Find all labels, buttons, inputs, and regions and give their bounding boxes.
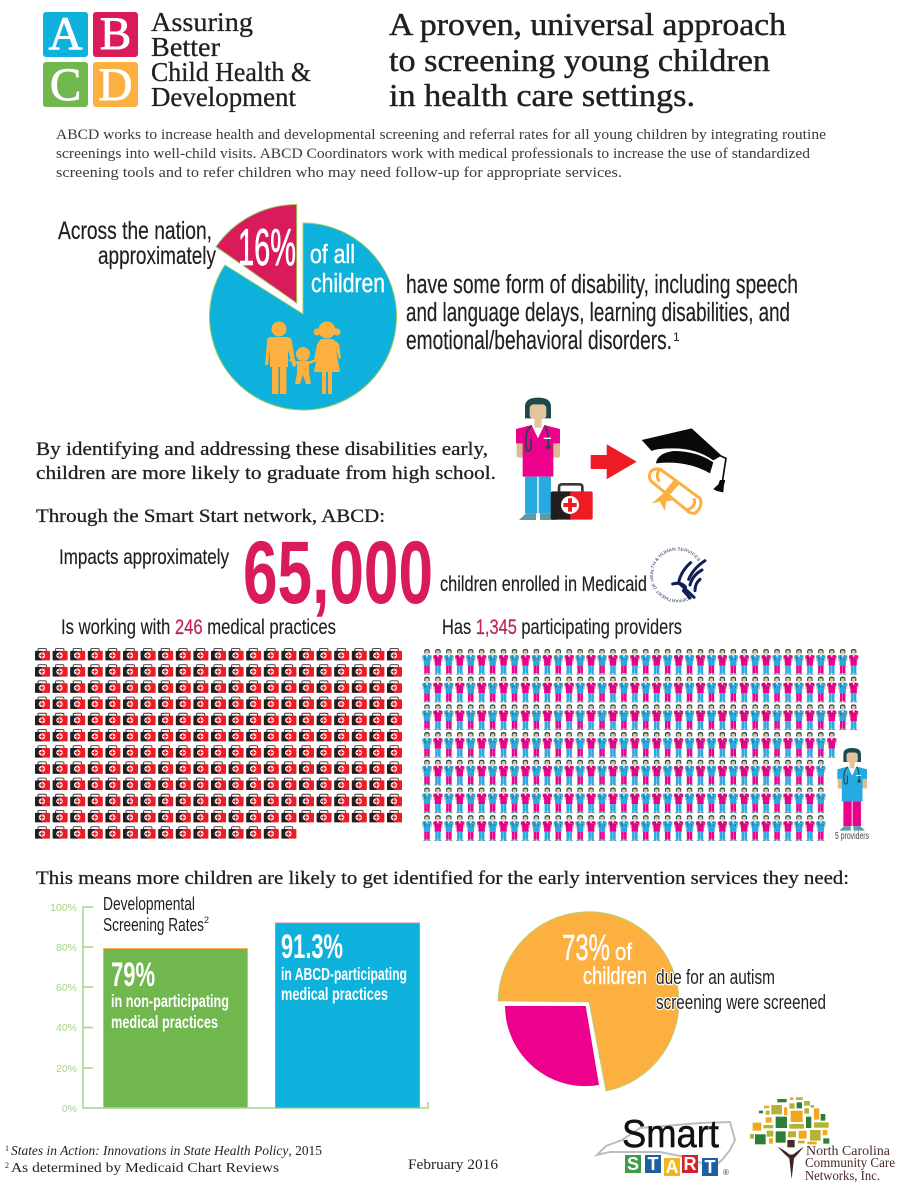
label: of all children [310,241,385,298]
footnotes: As determined by Medicaid Chart Reviews [11,1160,279,1175]
text: across the nation: Across the nation, [58,217,212,245]
stat: impacts 65,000 children [59,522,647,622]
axis: 40% [56,1022,77,1034]
heading: early intervention: This means more children are likely to get identified for the early intervention services they need: [36,868,849,889]
logo: North Carolina Community Care Networks: Community Care [805,1156,895,1171]
text: identifying early: By identifying and addressing these disabilities early, [36,439,488,460]
bar: 79%: in non-participating [111,991,229,1011]
footnotes: 2 [5,1161,9,1170]
axis: 60% [56,982,77,994]
icon: family [265,322,341,394]
logo: Smart Start: R [684,1154,696,1174]
label: 73% of children [562,927,647,990]
logo: Smart Start: S [627,1154,639,1174]
bar: 91.3%: 91.3% [281,928,343,966]
heading: medical practices: Is working with 246 medical practices [61,615,336,639]
heading: participating providers: Has 1,345 participating providers [442,615,682,639]
pictogram: 246 medical kits [35,648,402,839]
label: 73% of children: of [615,939,632,966]
block B: B [100,8,131,60]
logo: North Carolina Community Care Networks [750,1097,895,1182]
footnotes: 1 [5,1144,9,1153]
text: identifying early: children are more likely to graduate from high school. [36,463,496,484]
bar: 79%: 79% [111,956,155,994]
axis: 100% [50,902,77,914]
title [389,6,786,113]
block B [93,8,138,60]
bar: 79%: medical practices [111,1012,218,1032]
arrow [591,444,637,479]
bar: 79% [104,948,248,1108]
stat: impacts 65,000 children: 65,000 [243,522,433,622]
wordmark: Development [151,82,296,112]
pie slice: 27% [505,1006,599,1086]
legend: 5 providers [835,748,869,842]
axis: 20% [56,1063,77,1075]
pie chart: 16% of all children [210,204,397,410]
text: identifying early [36,439,496,484]
logo: Smart Start [597,1113,735,1177]
axis: 80% [56,942,77,954]
wordmark [151,7,311,112]
text: disability description: 1 [673,330,680,344]
wordmark: Child Health & [151,57,311,87]
bar: 91.3%: in ABCD-participating [281,964,407,984]
text: across the nation: approximately [98,242,216,270]
icon: doctor with medical kit [516,398,593,520]
icon: graduation cap and diploma [642,428,726,513]
title: A proven, universal approach [389,6,786,42]
block D: D [99,59,132,111]
bar chart: developmental screening rates [50,893,428,1115]
block C [43,59,88,111]
stat: impacts 65,000 children: children enrolled in Medicaid [440,572,647,596]
label: due for an autism screening [656,967,826,1014]
wordmark: Assuring [151,7,253,37]
title: in health care settings. [389,77,695,113]
chart title: 2 [204,915,209,925]
block C: C [50,59,81,111]
logo: ABCD blocks and wordmark [43,7,311,112]
title: to screening young children [389,42,770,78]
pie slice: 73% [498,912,679,1091]
logo: Smart Start: T [648,1154,658,1174]
logo: North Carolina Community Care Networks: North Carolina [806,1144,891,1159]
text: disability description: emotional/behavioral disorders. [406,327,672,355]
wordmark: Better [151,32,220,62]
intro paragraph [56,127,826,181]
logo: Smart Start: A [666,1157,678,1177]
pie chart: autism screening [498,912,826,1091]
footnotes [5,1143,322,1175]
stat: impacts 65,000 children: Impacts approximately [59,545,229,569]
label: of all children: children [311,270,385,298]
text: disability description [406,271,798,355]
chart title: Developmental [103,893,195,914]
label: of all children: of all [310,241,355,269]
intro paragraph: screenings into well-child visits. ABCD Coordinators work with medical professionals to increase the use of standardized [56,146,811,162]
label: due for an autism screening: due for an autism [656,967,775,989]
logo: Smart Start: ® [723,1168,729,1177]
label: 73% of children: children [583,963,647,990]
footnotes: States in Action: Innovations in State Health Policy, 2015 [11,1143,322,1158]
pictogram: provider figures [422,649,858,841]
text: through the smart start network: Through the Smart Start network, ABCD: [36,506,385,527]
intro paragraph: screening tools and to refer children who may need follow-up for appropriate services. [56,165,622,181]
bar: 91.3% [276,923,420,1108]
label: 16%: 16% [238,219,296,277]
chart title [103,893,209,935]
legend: 5 providers: 5 providers [835,831,869,842]
chart title: Screening Rates [103,914,204,935]
label: due for an autism screening: screening were screened [656,992,826,1014]
date: February 2016 [408,1157,498,1173]
axis [50,902,428,1115]
pie slice: 16% [216,204,297,303]
icon: HHS seal: DEPARTMENT OF HEALTH & HUMAN SERVICES · USA [650,547,700,602]
pie slice: 84% [210,223,397,410]
icon: HHS seal [650,547,707,602]
axis: 0% [62,1103,77,1115]
label: 73% of children: 73% [562,927,610,968]
bar: 91.3%: medical practices [281,984,388,1004]
text: across the nation [58,217,216,270]
logo: Smart Start: T [704,1157,716,1177]
block A: A [49,8,83,60]
logo: Smart Start: Smart [622,1113,719,1156]
intro paragraph: ABCD works to increase health and developmental screening and referral rates for all young children by integrating routine [56,127,826,143]
